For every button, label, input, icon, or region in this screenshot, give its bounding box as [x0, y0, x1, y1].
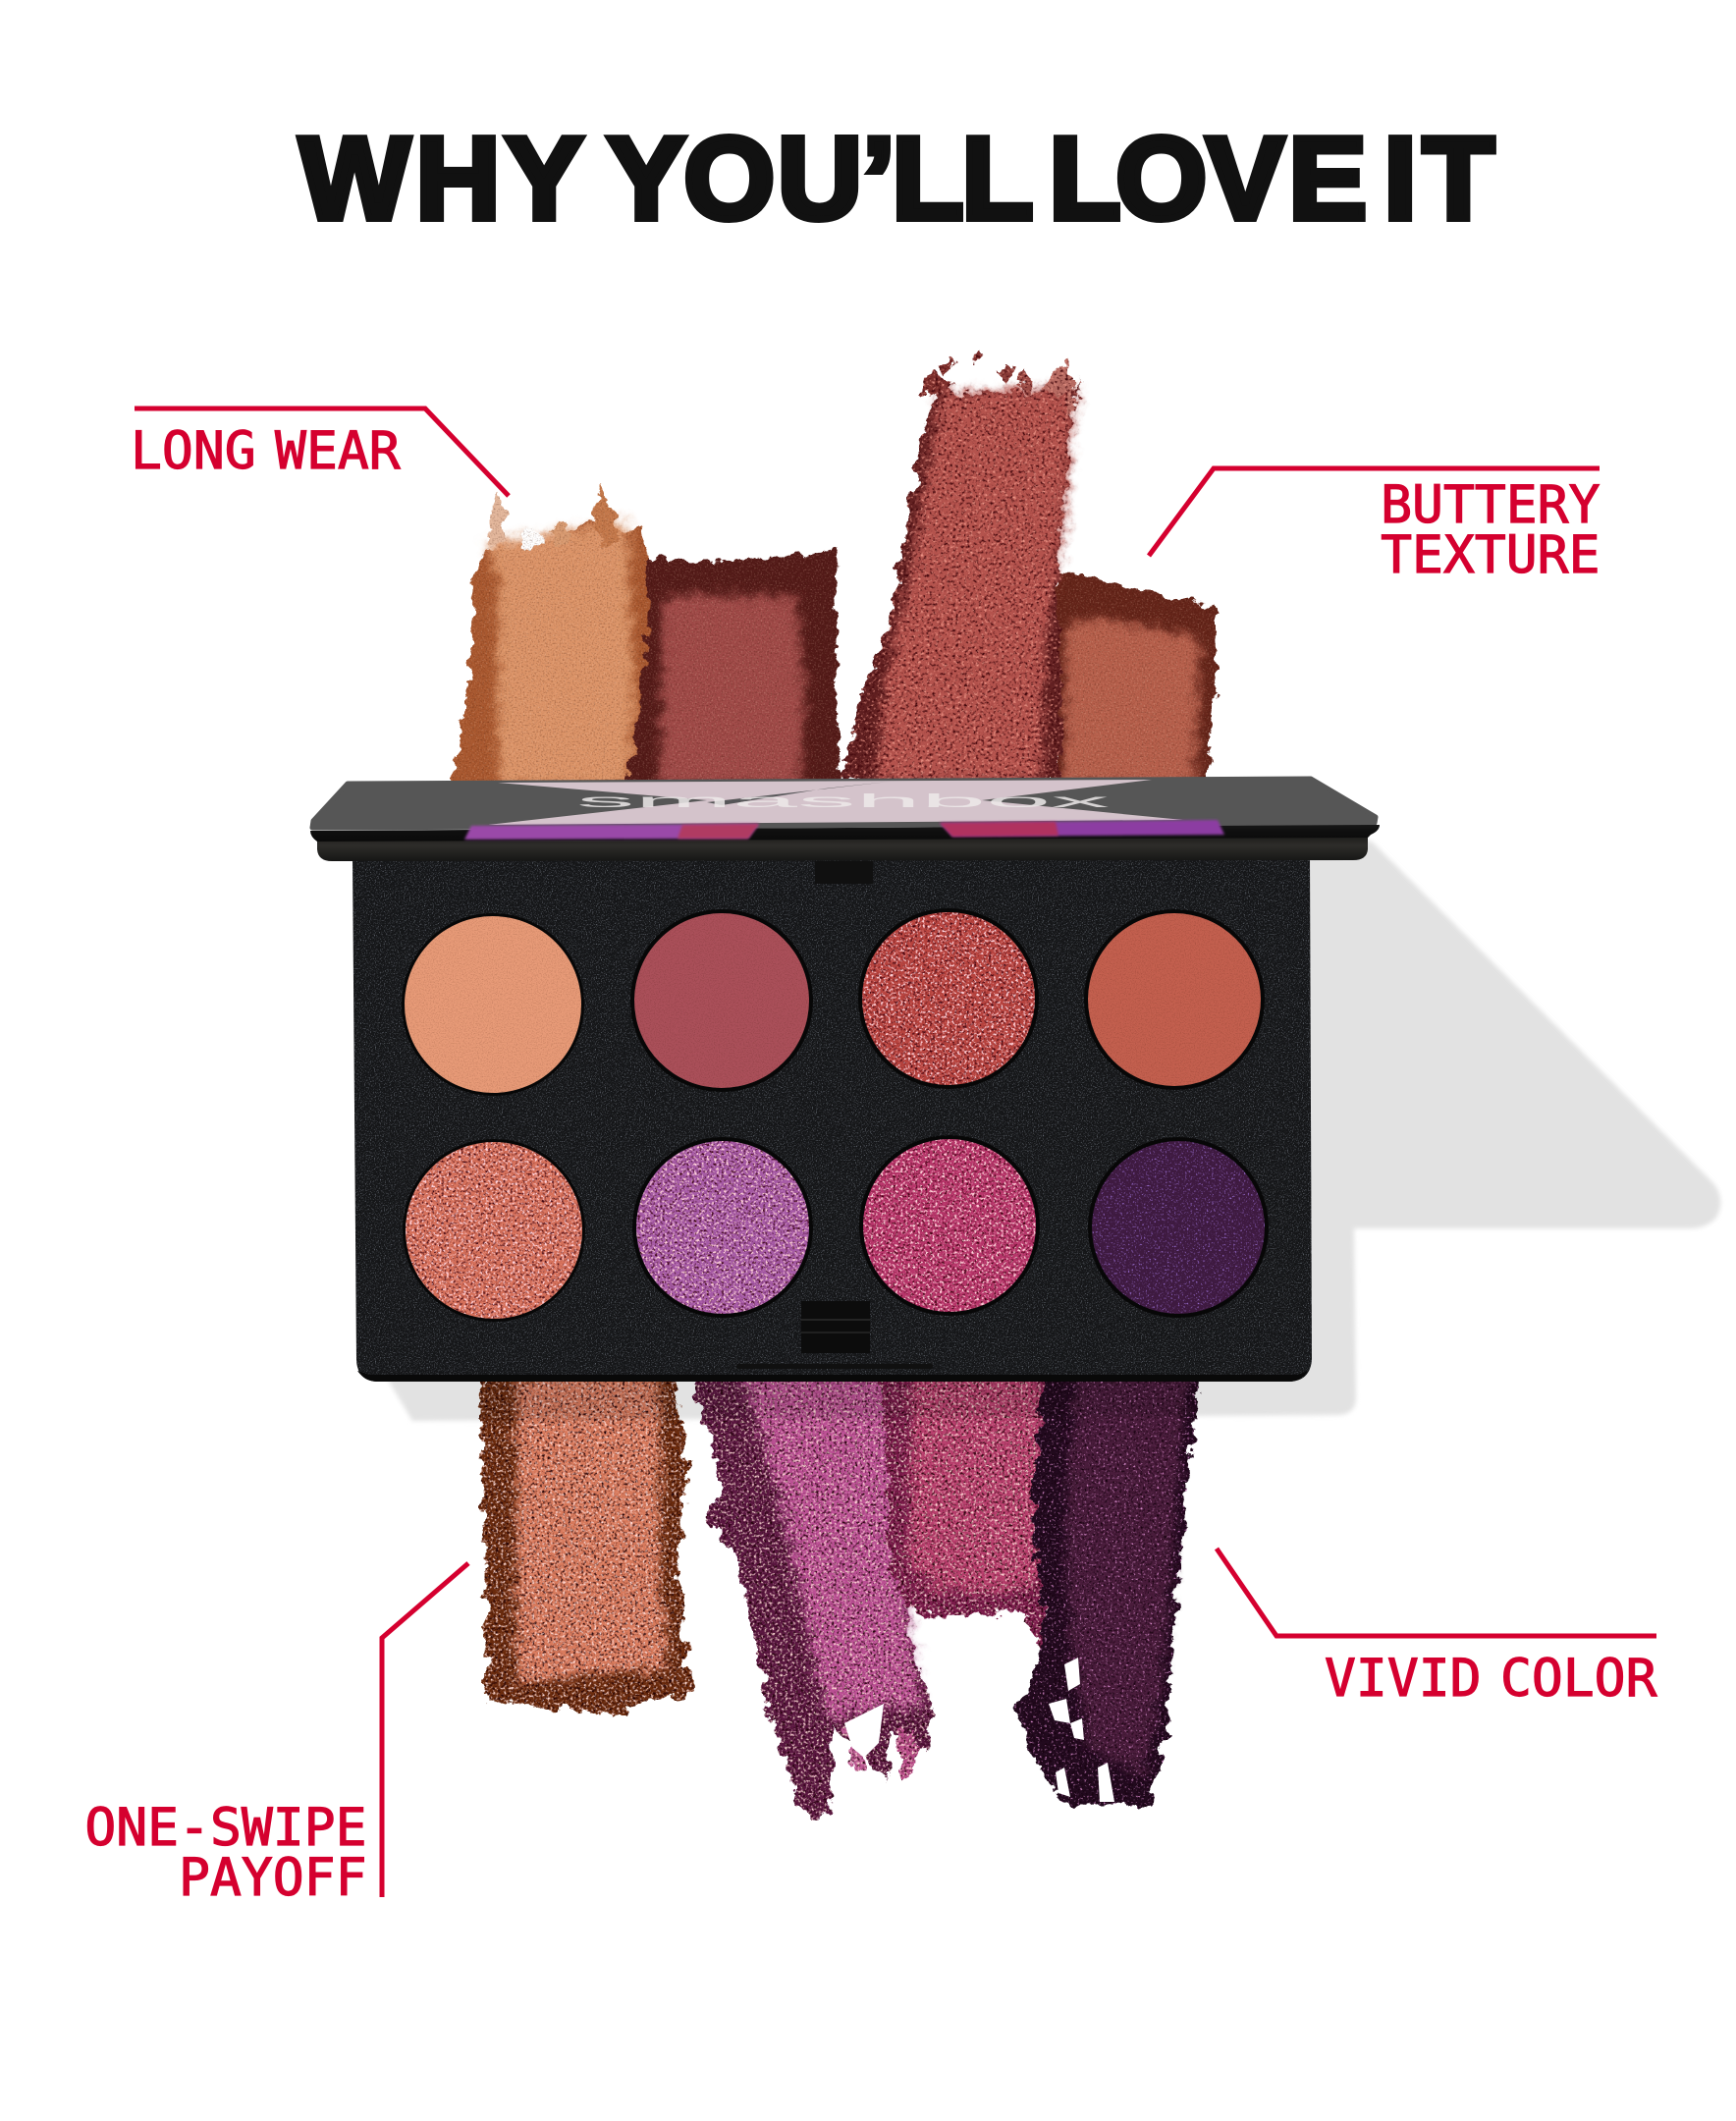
lid colour strip right accent: [940, 822, 1058, 837]
pan: terracotta matte: [1088, 913, 1261, 1086]
lid brand name: smashbox: [576, 790, 1110, 811]
palette bottom lip: [357, 1371, 1308, 1382]
lid dark wedge: [707, 782, 889, 805]
callout: long wear: [131, 408, 509, 496]
pan: rose matte: [634, 913, 809, 1088]
leader line: [135, 408, 509, 496]
plum swatch gaps: [1049, 1658, 1114, 1802]
lid colour strip right: [940, 820, 1224, 837]
lid colour strip left accent: [678, 824, 759, 839]
palette lid: [310, 779, 1380, 861]
lid front lower band: [317, 830, 1368, 861]
pan wells: [402, 908, 1269, 1322]
leader line: [382, 1563, 468, 1897]
pan: copper glitter: [862, 912, 1035, 1085]
pink swatch gaps: [844, 1704, 884, 1758]
pan: violet shimmer: [636, 1141, 809, 1314]
label: BUTTERY: [1381, 475, 1600, 535]
top eyeshadow swatches: [453, 349, 1216, 786]
callout: buttery texture: [1149, 468, 1600, 556]
swatch: rose glitter: [879, 1375, 1056, 1650]
title: WHY YOU’LL LOVE IT: [299, 114, 1494, 244]
tab top: [815, 861, 873, 884]
pan: peach matte: [405, 916, 581, 1093]
palette: [310, 779, 1380, 1382]
pan: plum shimmer: [1092, 1141, 1265, 1314]
label: VIVID COLOR: [1325, 1649, 1657, 1709]
pan: magenta glitter: [863, 1139, 1036, 1312]
label: LONG WEAR: [131, 421, 401, 481]
lid front black band: [310, 825, 1380, 842]
leader line: [1149, 468, 1600, 556]
swatch: deep rose matte: [628, 550, 841, 786]
leader line: [1217, 1549, 1656, 1636]
bottom slot: [736, 1364, 933, 1369]
swatch: plum glitter: [1016, 1375, 1200, 1807]
lid top surface: [312, 779, 1376, 828]
swatch: pink glitter: [690, 1375, 933, 1820]
palette base: [353, 856, 1312, 1382]
callout: vivid color: [1217, 1549, 1657, 1709]
label: ONE-SWIPE: [84, 1798, 367, 1858]
label line 2: payoff: PAYOFF: [179, 1848, 367, 1908]
pan: peach glitter: [406, 1142, 582, 1319]
swatch: peach glitter: [481, 1375, 692, 1723]
swatch: copper glitter tall: [841, 349, 1080, 782]
swatch: mauve matte: [1054, 570, 1216, 786]
callout: one-swipe payoff: [84, 1563, 468, 1897]
lid colour strip left: [464, 824, 759, 840]
bottom eyeshadow swatches: [481, 1375, 1200, 1820]
eyeshadow pans: [402, 908, 1269, 1322]
label line 2: texture: TEXTURE: [1381, 525, 1600, 585]
lid pale artwork: [488, 780, 1183, 825]
cast shadow: [388, 841, 1720, 1421]
latch: [801, 1301, 870, 1353]
swatch: peach matte: [453, 481, 653, 786]
